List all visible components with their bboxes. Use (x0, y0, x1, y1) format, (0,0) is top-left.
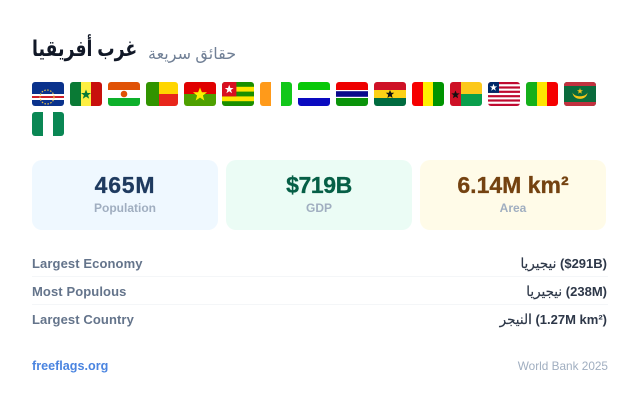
flag: Senegal (70, 82, 102, 106)
row label: largest economy: Largest Economy (32, 256, 143, 271)
row value: largest economy: نيجيريا ($291B) (520, 256, 607, 271)
flag row (32, 82, 596, 136)
flag: Gambia (336, 82, 368, 106)
flag: Benin (146, 82, 178, 106)
flag: Niger (108, 82, 140, 106)
flag: Cape Verde (32, 82, 64, 106)
GDP label: GDP (306, 201, 332, 215)
flag: Ghana (374, 82, 406, 106)
stat card: population (32, 160, 218, 230)
row value: most populous: نيجيريا (238M) (526, 284, 607, 299)
area label: Area (500, 201, 526, 215)
flag: Guinea (412, 82, 444, 106)
flag: Sierra Leone (298, 82, 330, 106)
GDP value: $719B (286, 172, 352, 198)
flag: Togo (222, 82, 254, 106)
population value: 465M (95, 172, 155, 198)
row label: largest country: Largest Country (32, 312, 134, 327)
row label: most populous: Most Populous (32, 284, 126, 299)
stat card: GDP (226, 160, 412, 230)
footer source: World Bank 2025 (518, 359, 608, 373)
flag: Mauritania (564, 82, 596, 106)
title: غرب أفريقيا (32, 36, 137, 61)
flag: Ivory Coast (260, 82, 292, 106)
flag: Liberia (488, 82, 520, 106)
population label: Population (94, 201, 156, 215)
flag: Nigeria (32, 112, 64, 136)
flag: Guinea-Bissau (450, 82, 482, 106)
footer link: freeflags.org (32, 359, 108, 373)
area value: 6.14M km² (457, 172, 569, 198)
flag: Mali (526, 82, 558, 106)
subtitle: حقائق سريعة (148, 46, 236, 63)
stat card: area (420, 160, 606, 230)
flag: Burkina Faso (184, 82, 216, 106)
row value: largest country: النيجر (1.27M km²) (500, 312, 607, 327)
